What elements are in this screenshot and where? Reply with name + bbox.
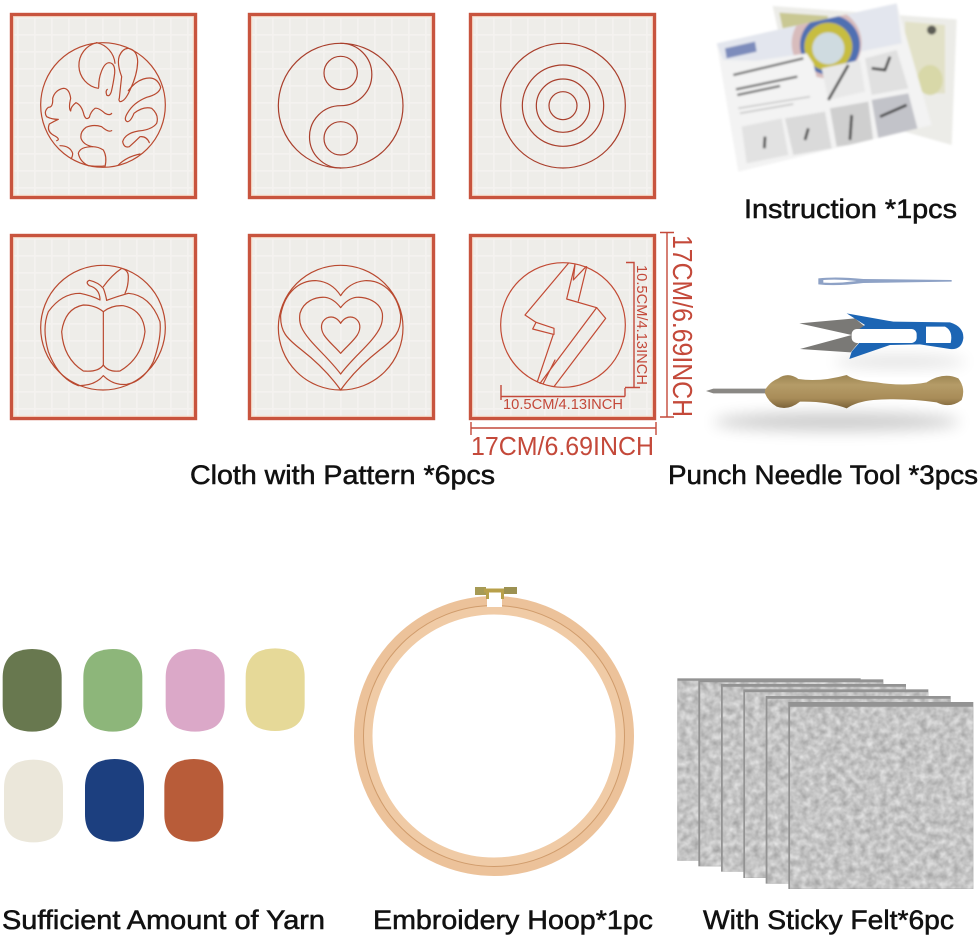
panel: cloth with leaf pattern [12,14,196,198]
yarn: pink [166,649,225,732]
panel: cloth with heart pattern [250,236,434,418]
panel: cloth with apple pattern [12,236,196,418]
panel: cloth with concentric rings pattern [470,14,654,198]
yarn: cream [4,760,63,842]
panel: cloth with yin-yang pattern [250,14,434,198]
panel: cloth with lightning bolt and dimensions [470,232,698,461]
pattern: concentric circles [501,43,625,168]
pattern: leaf circle [41,43,165,167]
dimension: cloth width: 17CM/6.69INCH [471,431,654,461]
embroidery hoop [359,587,629,871]
yarn: rust [164,759,223,842]
hoop: gap under the screw [487,596,502,607]
dimension: inner height: 10.5CM/4.13INCH [633,265,650,385]
photo: instruction sheets [717,3,957,172]
pattern: yin-yang circle [278,43,403,168]
pattern: nested hearts [278,265,403,390]
felt sheets [677,678,973,889]
yarn skeins [3,648,305,842]
felt sheet 6 [788,702,973,889]
felt sheet 3 [721,684,906,872]
label: punch needle tool: Punch Needle Tool *3pcs [668,460,978,490]
felt sheet 2 [698,679,883,866]
felt sheet 1 [677,678,861,861]
tool: blunt needle [818,277,952,285]
label: instruction: Instruction *1pcs [744,194,957,224]
tool: wooden punch needle [706,375,963,431]
felt sheet 5 [766,696,951,884]
hoop: outer ring [359,601,629,871]
tool: thread snips [799,313,967,368]
hoop: brass screw [475,587,517,599]
felt sheet 4 [743,689,928,878]
yarn: navy blue [85,759,144,842]
pattern: lightning bolt circle [501,263,625,387]
back sheet [773,6,957,145]
dimension: inner width: 10.5CM/4.13INCH [503,396,623,413]
dimension: inner width [501,385,640,413]
label: yarn: Sufficient Amount of Yarn [2,905,325,935]
yarn: dark green [3,649,62,732]
pattern: apple circle [41,265,165,390]
yarn: pale yellow [246,648,305,731]
yarn: light green [83,649,142,732]
front sheet [717,3,932,172]
dimension: inner height [626,262,650,388]
hoop: inner ring [368,610,620,862]
label: cloth with pattern: Cloth with Pattern *6pcs [190,460,495,490]
label: sticky felt: With Sticky Felt*6pc [703,905,954,935]
dimension: cloth height: 17CM/6.69INCH [667,235,698,417]
label: embroidery hoop: Embroidery Hoop*1pc [373,905,653,935]
photo: punch needle tools [706,277,967,431]
